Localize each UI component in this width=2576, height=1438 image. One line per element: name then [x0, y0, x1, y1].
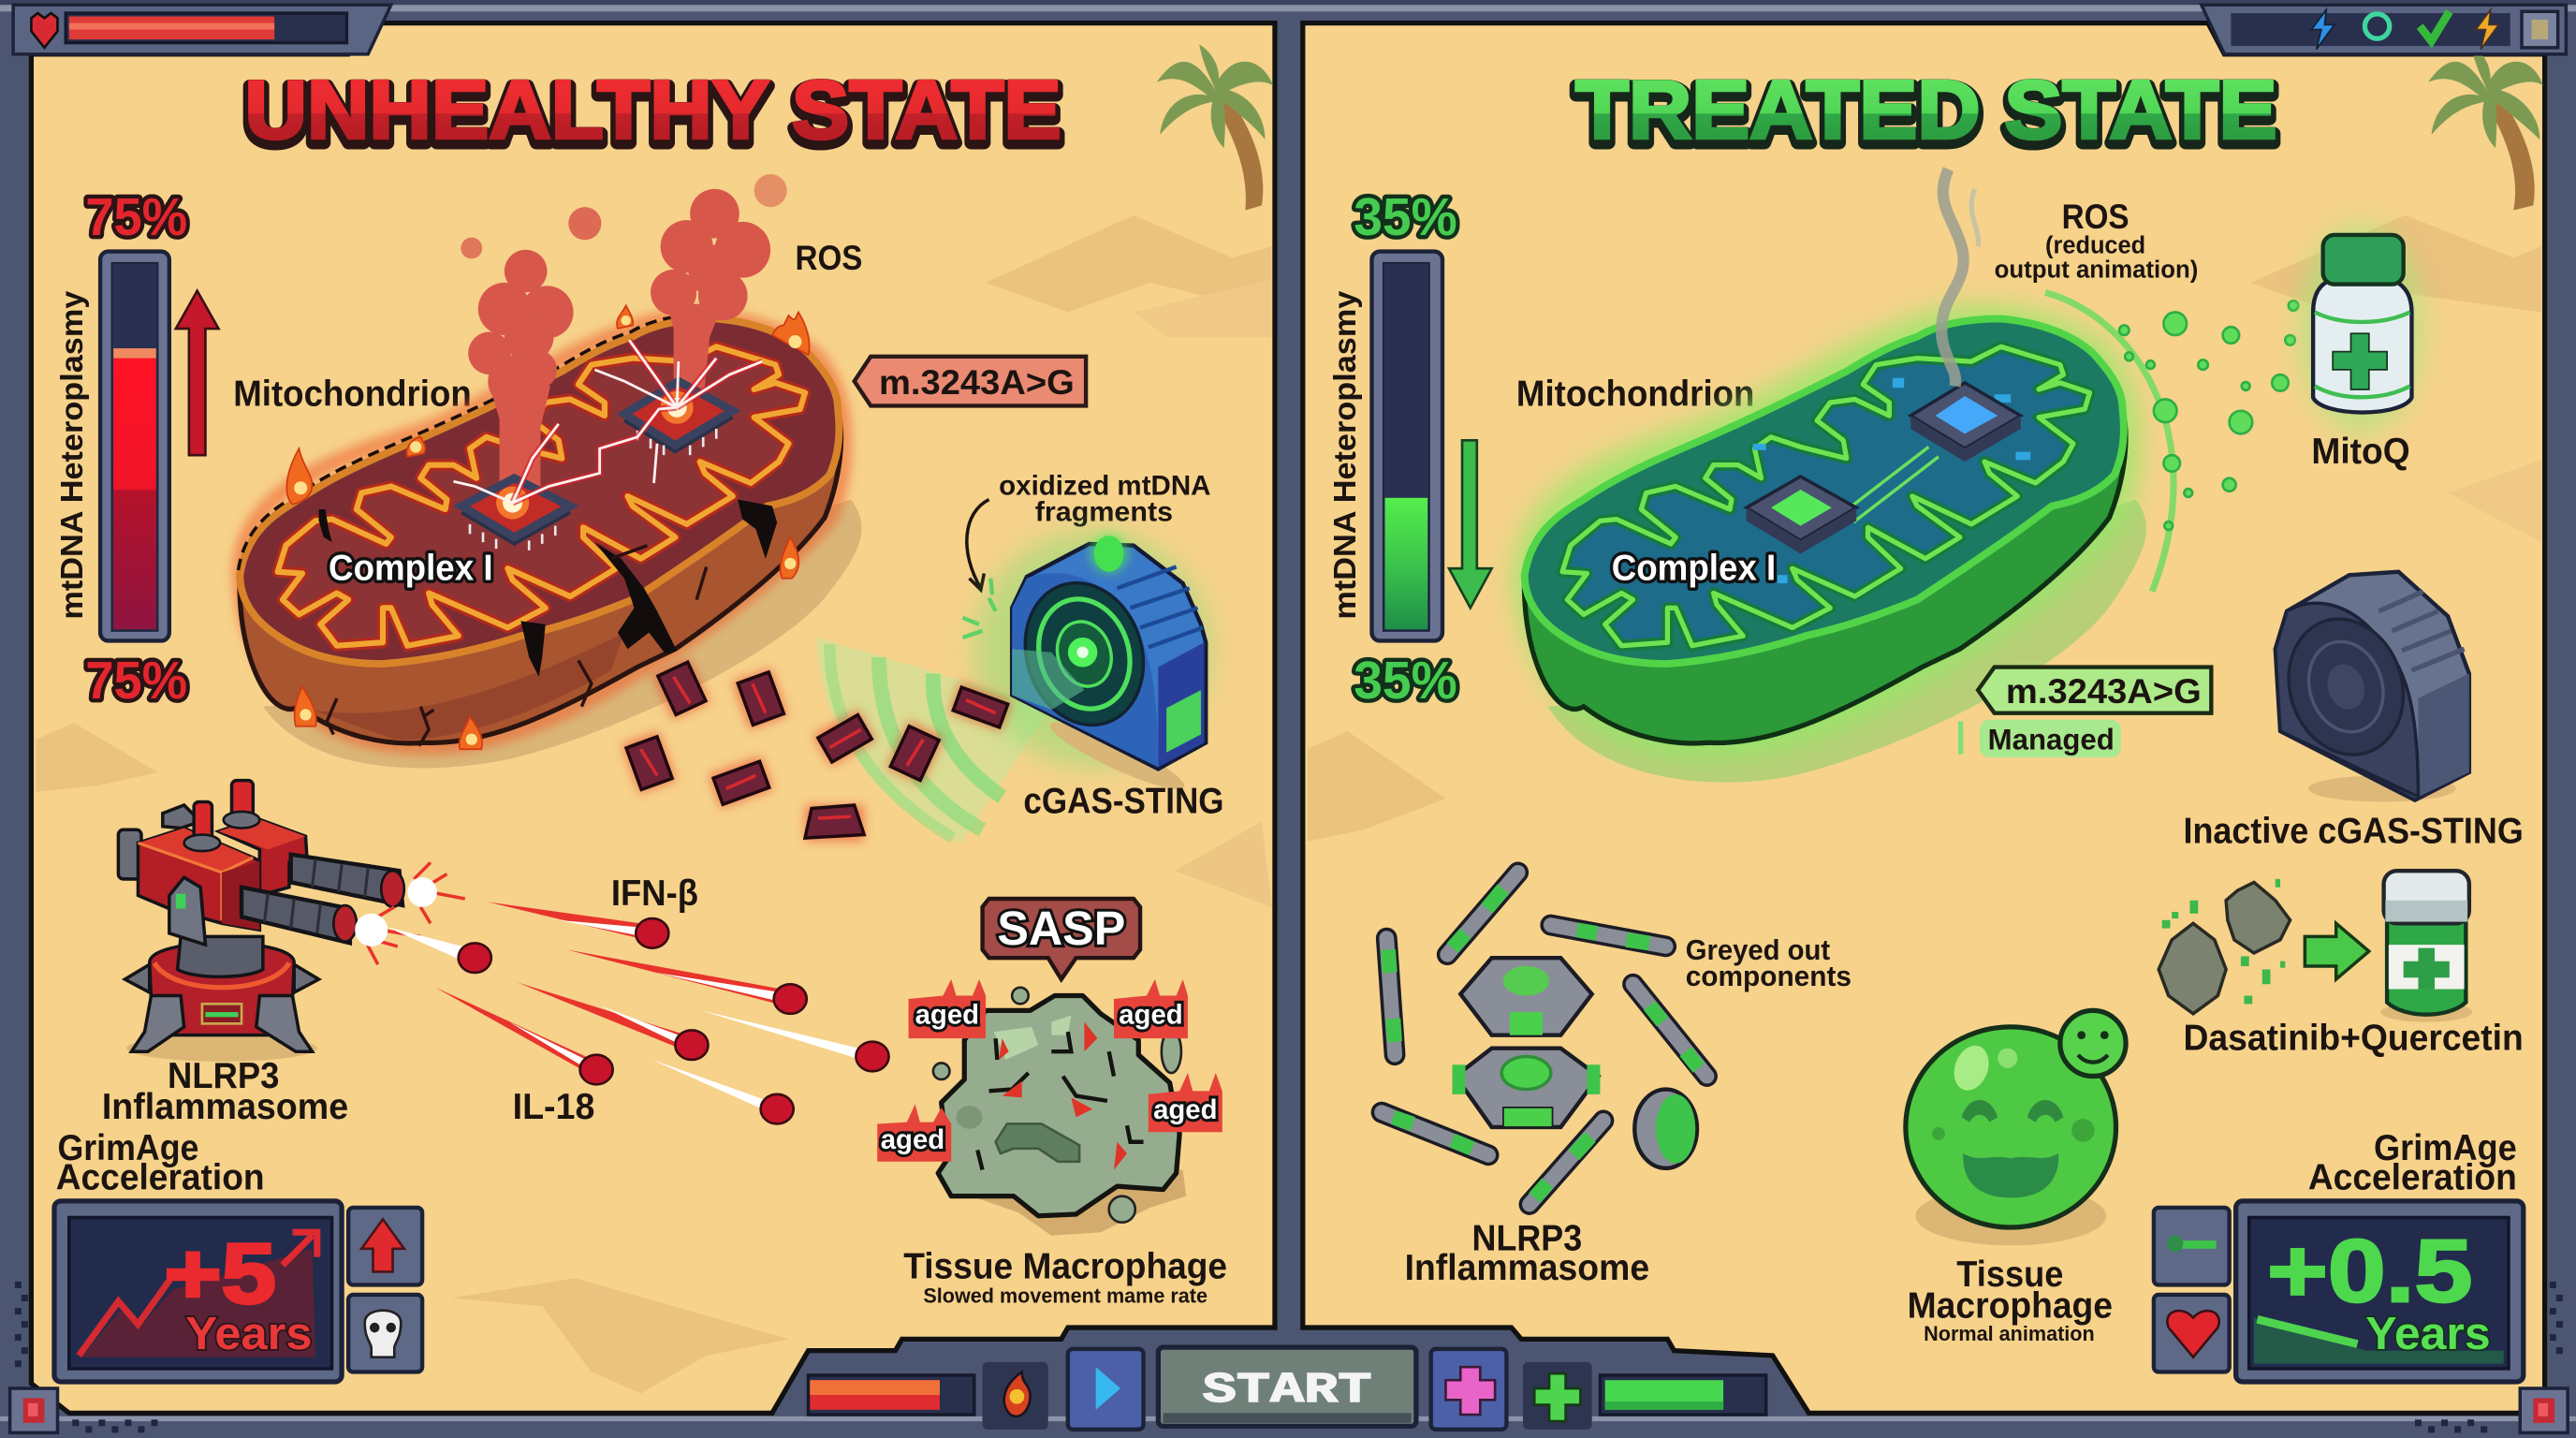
shield: green antioxidant arc [2045, 292, 2298, 592]
icon: corner gem right [2520, 1388, 2568, 1432]
button: start: START [1203, 1366, 1372, 1415]
label: 35 percent bottom: 35% [1354, 651, 1457, 710]
icon: corner gem left [10, 1388, 57, 1432]
label: dasatinib plus quercetin: Dasatinib+Quercetin [2183, 1018, 2524, 1058]
label: 75 percent top: 75% [85, 187, 187, 246]
tag: mutation m.3243A>G: m.3243A>G [879, 363, 1075, 402]
label: mtDNA heteroplasmy left: mtDNA Heteroplasmy [55, 290, 90, 620]
hexagon parts [1453, 958, 1600, 1127]
label: oxidized mtDNA fragments [999, 470, 1211, 527]
button: skull [348, 1295, 422, 1372]
tag: aged [1149, 1073, 1222, 1132]
cracks [319, 500, 777, 677]
panel: GrimAge +5 years: Years [185, 1309, 313, 1359]
title: unhealthy state: UNHEALTHY STATE [245, 64, 1061, 155]
panel: GrimAge +0.5 years: Years [2365, 1309, 2491, 1359]
label: cGAS-STING: cGAS-STING [1023, 782, 1224, 822]
label: greyed out components: components [1686, 960, 1852, 992]
badge: managed: Managed [1988, 722, 2115, 756]
label: 35 percent top: 35% [1354, 187, 1457, 246]
button: red up arrow [348, 1208, 422, 1284]
label: ROS left: ROS [795, 239, 862, 277]
label: tissue macrophage right: Normal animation [1924, 1322, 2095, 1345]
device: inactive cGAS-STING [2272, 572, 2469, 801]
icon: palm tree right [2428, 44, 2543, 211]
tag: aged: aged [1153, 1094, 1218, 1125]
illustration: disassembled NLRP3 [1382, 873, 1707, 1204]
label: tissue macrophage right [1908, 1255, 2113, 1345]
illustration: senescent macrophage [877, 979, 1222, 1236]
label: GrimAge acceleration right: Acceleration [2308, 1158, 2517, 1198]
illustration: healthy mitochondrion [1524, 316, 2146, 783]
label: oxidized mtDNA fragments: fragments [1035, 496, 1173, 527]
tag: aged [877, 1104, 951, 1162]
label: NLRP3 inflammasome right [1405, 1219, 1649, 1288]
HUD: bottom left bar [809, 1375, 974, 1415]
tag: managed mutation [1978, 668, 2211, 713]
label: 75 percent bottom: 75% [85, 651, 187, 710]
label: GrimAge acceleration left: GrimAge [57, 1128, 198, 1168]
smoke: ROS plumes [461, 174, 787, 501]
device: cGAS-STING sensor [963, 531, 1211, 799]
gauge: 35 percent heteroplasmy [1372, 252, 1442, 640]
tag: mutation m.3243A>G [855, 357, 1086, 405]
signal: green sensor fan [816, 638, 1051, 843]
gauge: 75 percent heteroplasmy [100, 252, 169, 640]
label: oxidized mtDNA fragments: oxidized mtDNA [999, 470, 1211, 501]
panel: unhealthy state background [31, 23, 1275, 1413]
label: NLRP3 inflammasome left [102, 1056, 348, 1127]
button: green bar icon [2154, 1208, 2230, 1284]
label: ROS reduced output: output animation) [1995, 256, 2198, 284]
HUD: bottom right bar [1600, 1375, 1766, 1415]
label: GrimAge acceleration left [56, 1128, 265, 1198]
label: MitoQ: MitoQ [2311, 432, 2410, 472]
tag: aged: aged [915, 999, 979, 1030]
title: treated state: TREATED STATE [1575, 64, 2277, 155]
label: NLRP3 inflammasome left: Inflammasome [102, 1087, 348, 1127]
label: ROS reduced output: ROS [2062, 198, 2130, 236]
label: NLRP3 inflammasome right: Inflammasome [1405, 1248, 1649, 1288]
label: tissue macrophage left: Tissue Macrophage [903, 1246, 1227, 1286]
label: mitochondrion left: Mitochondrion [233, 374, 472, 414]
tag: aged [909, 979, 986, 1038]
label: ROS reduced output: (reduced [2045, 230, 2145, 258]
label: tissue macrophage left: Slowed movement mame rate [923, 1284, 1208, 1308]
chip: complex I right [624, 381, 733, 455]
tag: managed mutation: m.3243A>G [2006, 672, 2202, 711]
illustration: damaged mitochondrion [239, 174, 861, 768]
HUD: health bar top left [13, 5, 391, 54]
panel: GrimAge +5 years: +5 [165, 1226, 276, 1322]
projectiles: cytokines [386, 902, 889, 1123]
callout: SASP: SASP [997, 902, 1125, 955]
callout: SASP [983, 899, 1140, 979]
label: mitochondrion right: Mitochondrion [1516, 374, 1754, 414]
label: complex I left: Complex I [329, 549, 493, 589]
label: ROS reduced output [1995, 198, 2198, 284]
panel: GrimAge +5 years [54, 1201, 342, 1382]
label: tissue macrophage right: Macrophage [1908, 1286, 2113, 1327]
chip: complex I blue [1910, 383, 2021, 462]
panel: GrimAge +0.5 years: +0.5 [2267, 1222, 2472, 1321]
arrow: heteroplasmy down [1449, 440, 1492, 608]
chip: complex I left [461, 478, 570, 550]
panel: treated state background [1303, 23, 2545, 1413]
label: NLRP3 inflammasome left: NLRP3 [168, 1056, 279, 1096]
label: IL-18: IL-18 [513, 1087, 594, 1127]
title: treated state: TREATED STATE [1575, 69, 2277, 161]
tag: aged [1114, 979, 1188, 1038]
icon: flame bomb [983, 1362, 1048, 1430]
tag: aged: aged [1119, 999, 1183, 1030]
smoke: reduced ROS wisp [1941, 169, 1979, 386]
label: NLRP3 inflammasome right: NLRP3 [1472, 1219, 1582, 1259]
icon: palm tree left [1157, 44, 1273, 211]
button: heart [2154, 1295, 2230, 1372]
rods [1382, 873, 1707, 1204]
label: greyed out components: Greyed out [1686, 933, 1830, 966]
illustration: healthy macrophage [1906, 1010, 2126, 1245]
button: play [1068, 1349, 1144, 1430]
label: greyed out components [1686, 933, 1852, 992]
icon: MitoQ bottle [2298, 224, 2423, 433]
arrow: heteroplasmy up [176, 291, 218, 455]
illustration: NLRP3 turret [118, 781, 465, 1062]
label: mtDNA heteroplasmy right: mtDNA Heteroplasmy [1328, 290, 1363, 620]
fragments: oxidized mtDNA [622, 658, 1013, 842]
flames [286, 305, 810, 749]
arrow: fragments to sensor [967, 500, 989, 590]
icon: cleared senescent cells [2159, 879, 2291, 1014]
label: tissue macrophage left [903, 1246, 1227, 1308]
lightning [513, 340, 762, 503]
button: magenta plus [1431, 1349, 1506, 1430]
icon: dasatinib quercetin jar [2380, 871, 2472, 1022]
label: complex I right: Complex I [1612, 549, 1776, 589]
label: GrimAge acceleration right: GrimAge [2374, 1128, 2517, 1168]
button: start [1158, 1347, 1416, 1426]
label: GrimAge acceleration left: Acceleration [56, 1158, 265, 1198]
label: tissue macrophage right: Tissue [1956, 1255, 2063, 1295]
panel: GrimAge +0.5 years [2236, 1201, 2524, 1382]
HUD: status icons top right [2202, 5, 2566, 54]
label: GrimAge acceleration right [2308, 1128, 2517, 1198]
chip: complex I green [1747, 477, 1856, 553]
label: IFN-beta: IFN-β [611, 873, 698, 914]
arrow: clearance green [2305, 923, 2369, 979]
tag: aged: aged [881, 1124, 944, 1155]
icon: green plus [1523, 1362, 1592, 1430]
title: unhealthy state: UNHEALTHY STATE [245, 69, 1061, 161]
label: inactive cGAS-STING: Inactive cGAS-STING [2183, 811, 2524, 851]
